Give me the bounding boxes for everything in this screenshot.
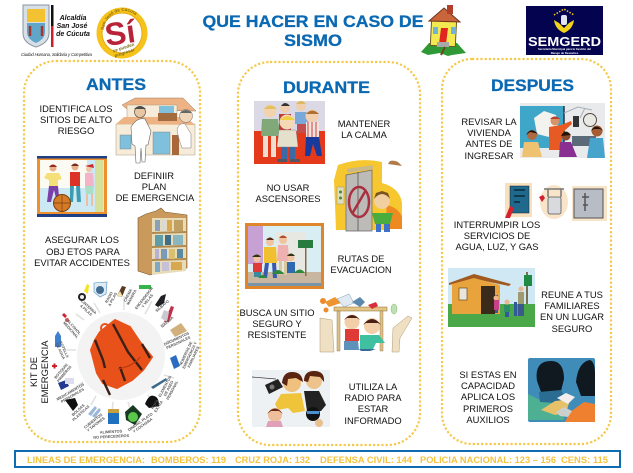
diagram: emergency backpack kit: PERSONALES [60,387,85,404]
text: definir plan: DEFINIIR [134,170,174,181]
diagram: emergency backpack kit: DE AGUA [55,343,66,360]
logo: SEMGERD [526,6,603,55]
diagram: emergency backpack kit: PLASTICAS [72,404,91,422]
diagram: emergency backpack kit: PERSONALES [166,335,191,350]
emergency phone lines bar: CENS: 115 [561,455,609,466]
diagram: emergency backpack kit: EXTRA [154,400,164,413]
diagram: emergency backpack kit: NAVAJA [160,316,175,329]
diagram: emergency backpack kit: BOTELLA [58,341,70,359]
text: interrumpir servicios: AGUA, LUZ, Y GAS [455,241,539,252]
diagram: emergency backpack kit: MANERA [126,289,138,306]
illustration: first aid [528,358,595,422]
text: asegurar: EVITAR ACCIDENTES [34,257,130,268]
diagram: emergency backpack kit: BOTIQUIN [54,363,69,380]
illustration: utilities shutoff [505,183,607,221]
text: reune a tus familiares: SEGURO [552,323,592,334]
text: no usar ascensores: ASCENSORES [255,193,321,204]
text: primeros auxilios: APLICA LOS [461,391,515,402]
diagram: emergency backpack kit: ELEMENTOS [158,375,172,398]
text: primeros auxilios: PRIMEROS [463,403,513,414]
kit items top [84,284,89,294]
diagram: emergency backpack kit: ALIMENTOS [100,429,122,435]
diagram: emergency backpack kit: Y COCHARA [132,417,154,434]
logo: Alcaldia San Jose de Cucuta: San José [57,23,87,30]
text: utiliza la radio: UTILIZA LA [349,381,398,392]
logo: Si se puede progresar [96,8,148,58]
logo: Alcaldia San Jose de Cucuta: Ciudad Humana, Solidaria y Competitiva [21,52,93,57]
title [202,13,424,50]
diagram: emergency backpack kit: ALCOHOL [66,319,82,336]
panel: durante [238,62,420,445]
diagram: emergency backpack kit: NO PERECEDEROS [93,434,130,440]
logo: Si se puede progresar: San José de Cúcuta [101,8,136,30]
heading: durante: DURANTE [283,79,370,97]
text: revisar la vivienda: INGRESAR [465,150,514,161]
text: definir plan: DE EMERGENCIA [116,192,195,203]
diagram: emergency backpack kit: CUBIERTOS [83,413,103,430]
illustration: inspecting home [520,103,605,158]
text: identifica: SITIOS DE ALTO [40,114,112,125]
diagram: emergency backpack kit [52,282,202,440]
illustration: calm kids [254,101,325,164]
text: mantener la calma: MANTENER [338,118,391,129]
icon: shaking house [421,5,466,56]
kit labels: A PILAS [79,304,93,317]
text: busca un sitio: BUSCA UN SITIO [239,307,315,318]
text: rutas de evacuacion: RUTAS DE [338,253,384,264]
diagram: emergency backpack kit: BOLSAS [71,403,86,417]
illustration: family listening to radio [252,370,330,427]
diagram: emergency backpack kit: DOCUMENTOS [163,331,190,347]
text: identifica: IDENTIFICA LOS [40,103,112,114]
text: kit de emergencia: EMERGENCIA [39,340,50,404]
text: mantener la calma: LA CALMA [341,129,388,140]
diagram: emergency backpack kit: DE ASEO [163,380,175,397]
diagram: emergency backpack kit: DINERO, PLATO [127,412,154,432]
logo: Alcaldia San Jose de Cucuta [21,5,93,57]
panel: antes [24,61,202,442]
diagram: emergency backpack kit: RADIO [104,291,114,304]
text: revisar la vivienda: ANTES DE [466,138,512,149]
diagram: emergency backpack kit: Y TAPONES [86,416,106,433]
logo: Si se puede progresar: Sí [103,13,139,53]
text: utiliza la radio: RADIO PARA [344,392,402,403]
text: busca un sitio: SEGURO Y [252,318,302,329]
text: rutas de evacuacion: EVACUACION [330,264,392,275]
text: interrumpir servicios: INTERRUMPIR LOS [454,219,540,230]
text: definir plan: PLAN [142,181,166,192]
illustration: kids under table [320,294,412,352]
diagram: emergency backpack kit: PRIMEROS [56,365,73,383]
diagram: emergency backpack kit: ENCENDEDOR [134,287,154,310]
emergency phone lines bar: DEFENSA CIVIL: 144 [320,455,413,466]
logo: Si se puede progresar: se pueden [112,42,135,53]
text: utiliza la radio: ESTAR [358,403,389,414]
diagram: emergency backpack kit: SILBATO [155,299,170,313]
emergency phone lines bar: BOMBEROS: 119 [151,455,226,466]
diagram: emergency backpack kit: MEDICINAL [62,321,80,340]
title: SISMO [284,32,342,50]
illustration: bookshelf [138,208,187,275]
diagram: emergency backpack kit: FAMILIARES [187,345,201,368]
illustration: family meeting point [448,268,535,327]
text: kit de emergencia: KIT DE [28,357,39,387]
illustration: family planning [37,156,107,217]
diagram: emergency backpack kit: NUMEROS DE [179,341,193,366]
diagram: emergency backpack kit: PERSONAL [166,380,180,401]
text: interrumpir servicios: SERVICIOS DE [464,230,530,241]
text: primeros auxilios: SI ESTAS EN [459,369,517,380]
text: asegurar: ASEGURAR LOS [45,234,119,245]
logo: Alcaldia San Jose de Cucuta: Alcaldía [59,15,87,22]
diagram: emergency backpack kit: EMERGENCIA Y [182,341,198,369]
logo: Alcaldia San Jose de Cucuta: de Cúcuta [56,31,90,38]
text: no usar ascensores: NO USAR [267,182,310,193]
title: QUE HACER EN CASO DE [202,13,424,31]
text: revisar la vivienda: VIVIENDA [467,127,512,138]
diagram: emergency backpack kit: Y VELAS [141,293,154,309]
illustration: elevator [334,160,402,232]
illustration: evacuation routes [245,223,324,289]
text: primeros auxilios: CAPACIDAD [461,380,515,391]
logo: SEMGERD: SEMGERD [528,34,601,49]
kit labels: LINTERNA [80,299,97,315]
text: reune a tus familiares: REUNE A TUS [541,289,603,300]
text: utiliza la radio: INFORMADO [344,415,402,426]
heading: despues: DESPUES [491,77,574,95]
panel: despues [442,59,611,444]
text: identifica: RIESGO [58,125,94,136]
emergency phone lines bar: LINEAS DE EMERGENCIA: [27,455,145,466]
diagram: emergency backpack kit: CREMA [123,288,133,303]
illustration: house inspection [116,98,196,163]
logo: Si se puede progresar: progresar [114,47,136,58]
diagram: emergency backpack kit: A PILAS [108,292,118,307]
diagram: emergency backpack kit: ROPA [151,399,160,410]
text: reune a tus familiares: FAMILIARES [544,300,600,311]
logo: SEMGERD: Secretaría Municipal para la Gestión del [538,47,591,51]
diagram: emergency backpack kit: MEDICAMENTOS [56,383,85,402]
text: revisar la vivienda: REVISAR LA [461,116,517,127]
text: busca un sitio: RESISTENTE [248,329,306,340]
text: primeros auxilios: AUXILIOS [466,414,510,425]
text: reune a tus familiares: EN UN LUGAR [540,311,604,322]
heading: antes: ANTES [86,76,146,94]
emergency phone lines bar: CRUZ ROJA: 132 [235,455,310,466]
text: asegurar: OBJ ETOS PARA [46,246,121,257]
emergency phone lines bar [15,451,620,467]
logo: SEMGERD: Riesgo de Desastres [551,51,579,55]
emergency phone lines bar: POLICIA NACIONAL: 123 – 156 [420,455,556,466]
